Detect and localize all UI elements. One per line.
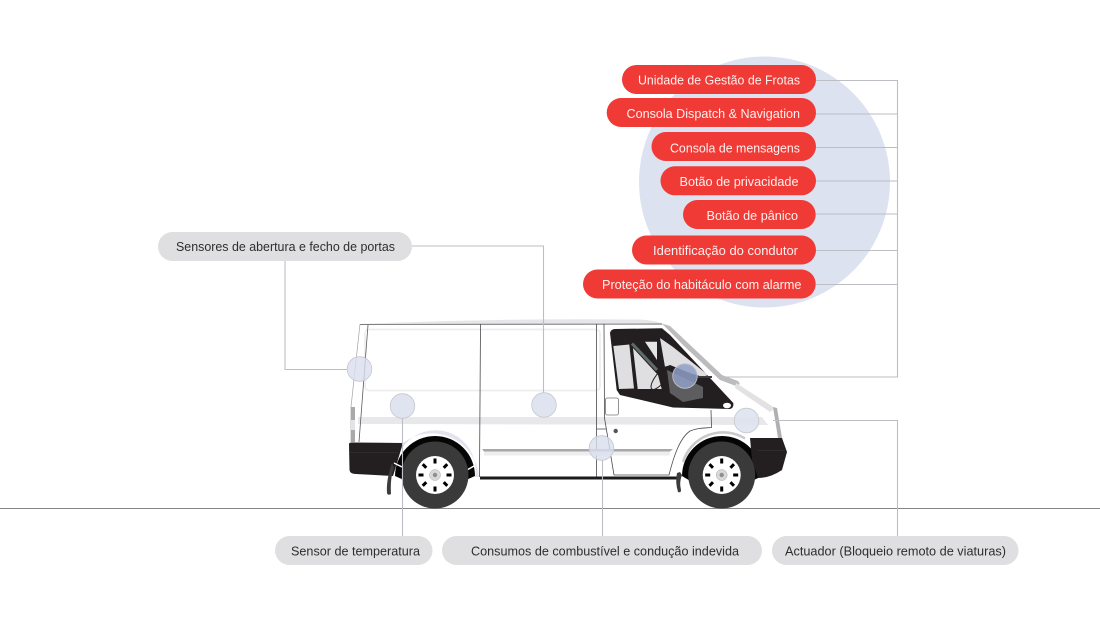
label: Sensor de temperatura (275, 536, 432, 565)
front mud flap (676, 472, 682, 492)
label: Actuador (Bloqueio remoto de viaturas): Actuador (Bloqueio remoto de viaturas) (785, 544, 1006, 558)
sensor marker: side door (532, 393, 556, 417)
side trim (482, 449, 673, 452)
label: Consola Dispatch & Navigation (607, 98, 816, 127)
pillar and mirror detail (632, 344, 657, 370)
van illustration (349, 319, 787, 508)
side stripe (358, 417, 768, 425)
label: Unidade de Gestão de Frotas: Unidade de Gestão de Frotas (638, 72, 800, 88)
sill (480, 476, 678, 480)
rear wheel (402, 442, 468, 508)
label: Consola Dispatch & Navigation: Consola Dispatch & Navigation (626, 106, 800, 121)
door handle (606, 398, 618, 415)
label: Proteção do habitáculo com alarme: Proteção do habitáculo com alarme (602, 277, 802, 292)
windshield edge shading (662, 324, 740, 386)
roof highlight (361, 319, 668, 326)
label: Consola de mensagens: Consola de mensagens (670, 140, 800, 156)
sensor marker: actuator (734, 408, 759, 433)
rear mud flap (387, 463, 394, 495)
label: Botão de pânico: Botão de pânico (706, 208, 798, 223)
label: Identificação do condutor: Identificação do condutor (653, 243, 799, 258)
door lines (480, 324, 712, 477)
label: Sensores de abertura e fecho de portas (158, 232, 412, 261)
front wheel (688, 442, 755, 508)
label: Botão de privacidade (660, 166, 816, 195)
label: Consola de mensagens (652, 132, 816, 161)
hood shading (735, 383, 775, 412)
roof line (360, 323, 662, 326)
steering wheel (648, 364, 673, 392)
label: Unidade de Gestão de Frotas (622, 65, 816, 94)
connector lines (285, 80, 898, 536)
front arch highlight (683, 432, 745, 462)
background circle behind red labels (639, 56, 890, 308)
ground line (0, 508, 1100, 510)
label: Botão de privacidade: Botão de privacidade (680, 174, 798, 189)
rear arch (403, 430, 479, 477)
label: Consumos de combustível e condução indevida (442, 536, 762, 565)
side mirror arm (696, 376, 712, 378)
sensor marker: rear door (347, 357, 372, 381)
sensor marker: cabin (673, 364, 697, 388)
sensor marker: temperature (390, 394, 415, 418)
front arch (682, 436, 762, 482)
window panes (613, 338, 708, 389)
label: Sensores de abertura e fecho de portas: Sensores de abertura e fecho de portas (176, 239, 395, 254)
sensor marker: fuel (589, 436, 614, 460)
rear bumper (349, 442, 403, 476)
headlight notch (723, 403, 731, 408)
window frame (610, 328, 733, 409)
rear light (351, 407, 355, 442)
rear edge outer (351, 324, 360, 442)
front edge shading (773, 407, 782, 438)
label: Consumos de combustível e condução indevida: Consumos de combustível e condução indevida (471, 544, 740, 558)
door lock (614, 429, 618, 433)
van body (351, 324, 781, 478)
label: Sensor de temperatura: Sensor de temperatura (291, 544, 421, 558)
rear edge inner (359, 325, 368, 442)
side window trim (365, 330, 600, 390)
label: Proteção do habitáculo com alarme (583, 270, 816, 298)
label: Botão de pânico (683, 200, 816, 229)
label: Actuador (Bloqueio remoto de viaturas) (772, 536, 1018, 565)
seat and dashboard (667, 370, 703, 402)
label: Identificação do condutor (632, 236, 816, 264)
front bumper (750, 438, 787, 478)
